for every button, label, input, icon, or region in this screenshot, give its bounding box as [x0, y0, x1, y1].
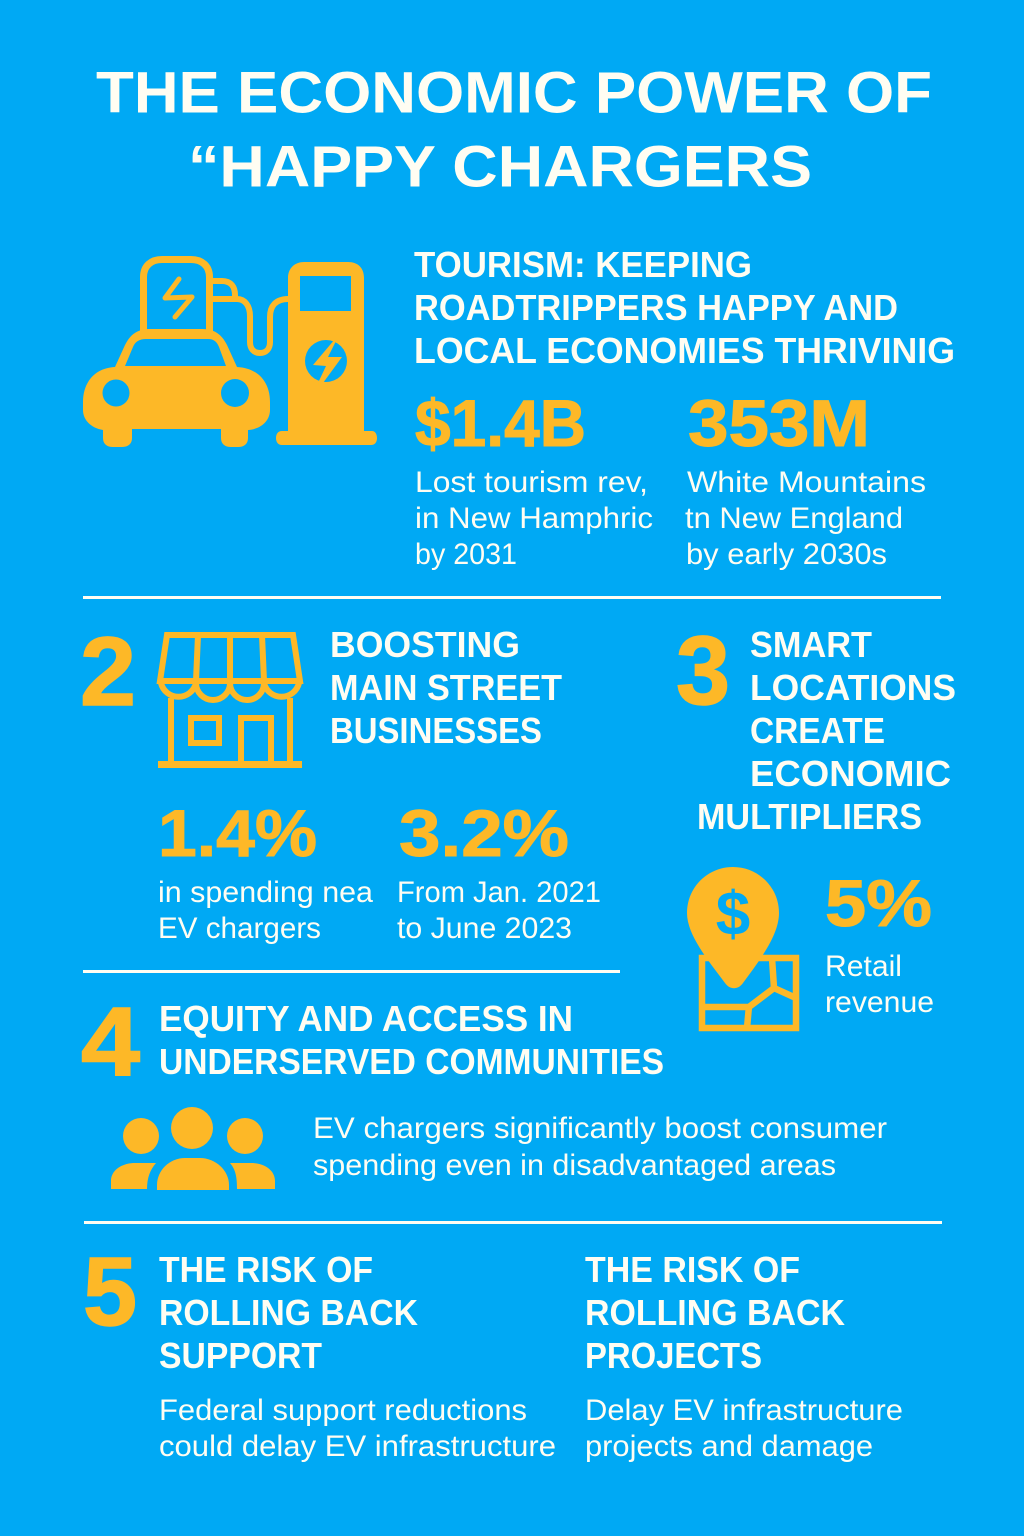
text: lost tourism revenue: by 2031 — [415, 538, 517, 571]
text: equity description: EV chargers significantly boost consumer — [313, 1112, 887, 1145]
title — [96, 60, 932, 200]
icon: map pin with dollar — [687, 867, 796, 1028]
panel: risk of rolling back — [83, 1237, 903, 1463]
heading: rolling back projects: THE RISK OF — [585, 1249, 800, 1290]
text: retail revenue: Retail — [825, 950, 902, 983]
icon: storefront — [158, 635, 302, 764]
text: federal support: could delay EV infrastructure — [159, 1430, 556, 1463]
text: federal support — [159, 1394, 556, 1463]
title: THE ECONOMIC POWER OF — [96, 60, 932, 126]
text: white mountains: by early 2030s — [686, 538, 887, 571]
heading: rolling back support — [159, 1249, 418, 1376]
heading: tourism: ROADTRIPPERS HAPPY AND — [414, 287, 898, 328]
text: equity description — [313, 1112, 887, 1182]
panel: tourism — [83, 244, 955, 571]
number 3: 3 — [676, 616, 730, 725]
heading: smart locations: SMART — [750, 624, 872, 665]
heading: smart locations: ECONOMIC — [750, 753, 951, 794]
text: spending near chargers: in spending nea — [158, 876, 373, 909]
text: spending near chargers — [158, 876, 373, 945]
heading: tourism — [414, 244, 955, 371]
text: lost tourism revenue: in New Hamphric — [415, 502, 653, 535]
text: lost tourism revenue: Lost tourism rev, — [415, 466, 648, 499]
number 4: 4 — [81, 987, 140, 1096]
text: lost tourism revenue — [415, 466, 653, 571]
title: “HAPPY CHARGERS — [188, 134, 812, 200]
panel: smart locations — [676, 616, 956, 1028]
stat: 1.4%: 1.4% — [158, 796, 317, 870]
heading: rolling back support: ROLLING BACK — [159, 1292, 418, 1333]
heading: boosting main street: BUSINESSES — [330, 710, 542, 751]
stat: $1.4B: $1.4B — [415, 386, 586, 460]
text: delay projects — [585, 1394, 903, 1463]
text: equity description: spending even in disadvantaged areas — [313, 1149, 836, 1182]
text: delay projects: Delay EV infrastructure — [585, 1394, 903, 1427]
stat: 353M: 353M — [688, 386, 870, 460]
number 2: 2 — [80, 617, 136, 726]
heading: tourism: TOURISM: KEEPING — [414, 244, 752, 285]
stat: 3.2%: 3.2% — [399, 796, 569, 870]
text: white mountains: White Mountains — [687, 466, 926, 499]
heading: boosting main street: MAIN STREET — [330, 667, 562, 708]
heading: smart locations: MULTIPLIERS — [697, 796, 922, 837]
text: date range — [397, 876, 601, 945]
heading: rolling back support: SUPPORT — [159, 1335, 322, 1376]
text: date range: From Jan. 2021 — [397, 876, 601, 909]
heading: smart locations — [697, 624, 956, 837]
text: retail revenue — [825, 950, 934, 1019]
stat: 5%: 5% — [825, 866, 932, 940]
panel: main street businesses — [80, 617, 601, 945]
icon: map pin with dollar: $ — [716, 880, 750, 949]
text: date range: to June 2023 — [397, 912, 572, 945]
icon: people — [111, 1107, 275, 1190]
heading: equity and access — [159, 998, 664, 1082]
heading: rolling back support: THE RISK OF — [159, 1249, 373, 1290]
text: white mountains — [685, 466, 926, 571]
heading: boosting main street: BOOSTING — [330, 624, 520, 665]
text: spending near chargers: EV chargers — [158, 912, 321, 945]
number 5: 5 — [83, 1237, 137, 1346]
heading: rolling back projects — [585, 1249, 845, 1376]
heading: tourism: LOCAL ECONOMIES THRIVINIG — [414, 330, 955, 371]
text: white mountains: tn New England — [685, 502, 903, 535]
heading: smart locations: CREATE — [750, 710, 885, 751]
heading: equity and access: EQUITY AND ACCESS IN — [159, 998, 573, 1039]
heading: rolling back projects: PROJECTS — [585, 1335, 762, 1376]
icon: electric car at charging pump — [83, 260, 377, 447]
text: retail revenue: revenue — [825, 986, 934, 1019]
panel: equity and access — [81, 987, 887, 1190]
text: delay projects: projects and damage — [585, 1430, 873, 1463]
heading: boosting main street — [330, 624, 562, 751]
heading: equity and access: UNDERSERVED COMMUNITIES — [159, 1041, 664, 1082]
text: federal support: Federal support reductions — [159, 1394, 527, 1427]
heading: smart locations: LOCATIONS — [750, 667, 956, 708]
heading: rolling back projects: ROLLING BACK — [585, 1292, 845, 1333]
